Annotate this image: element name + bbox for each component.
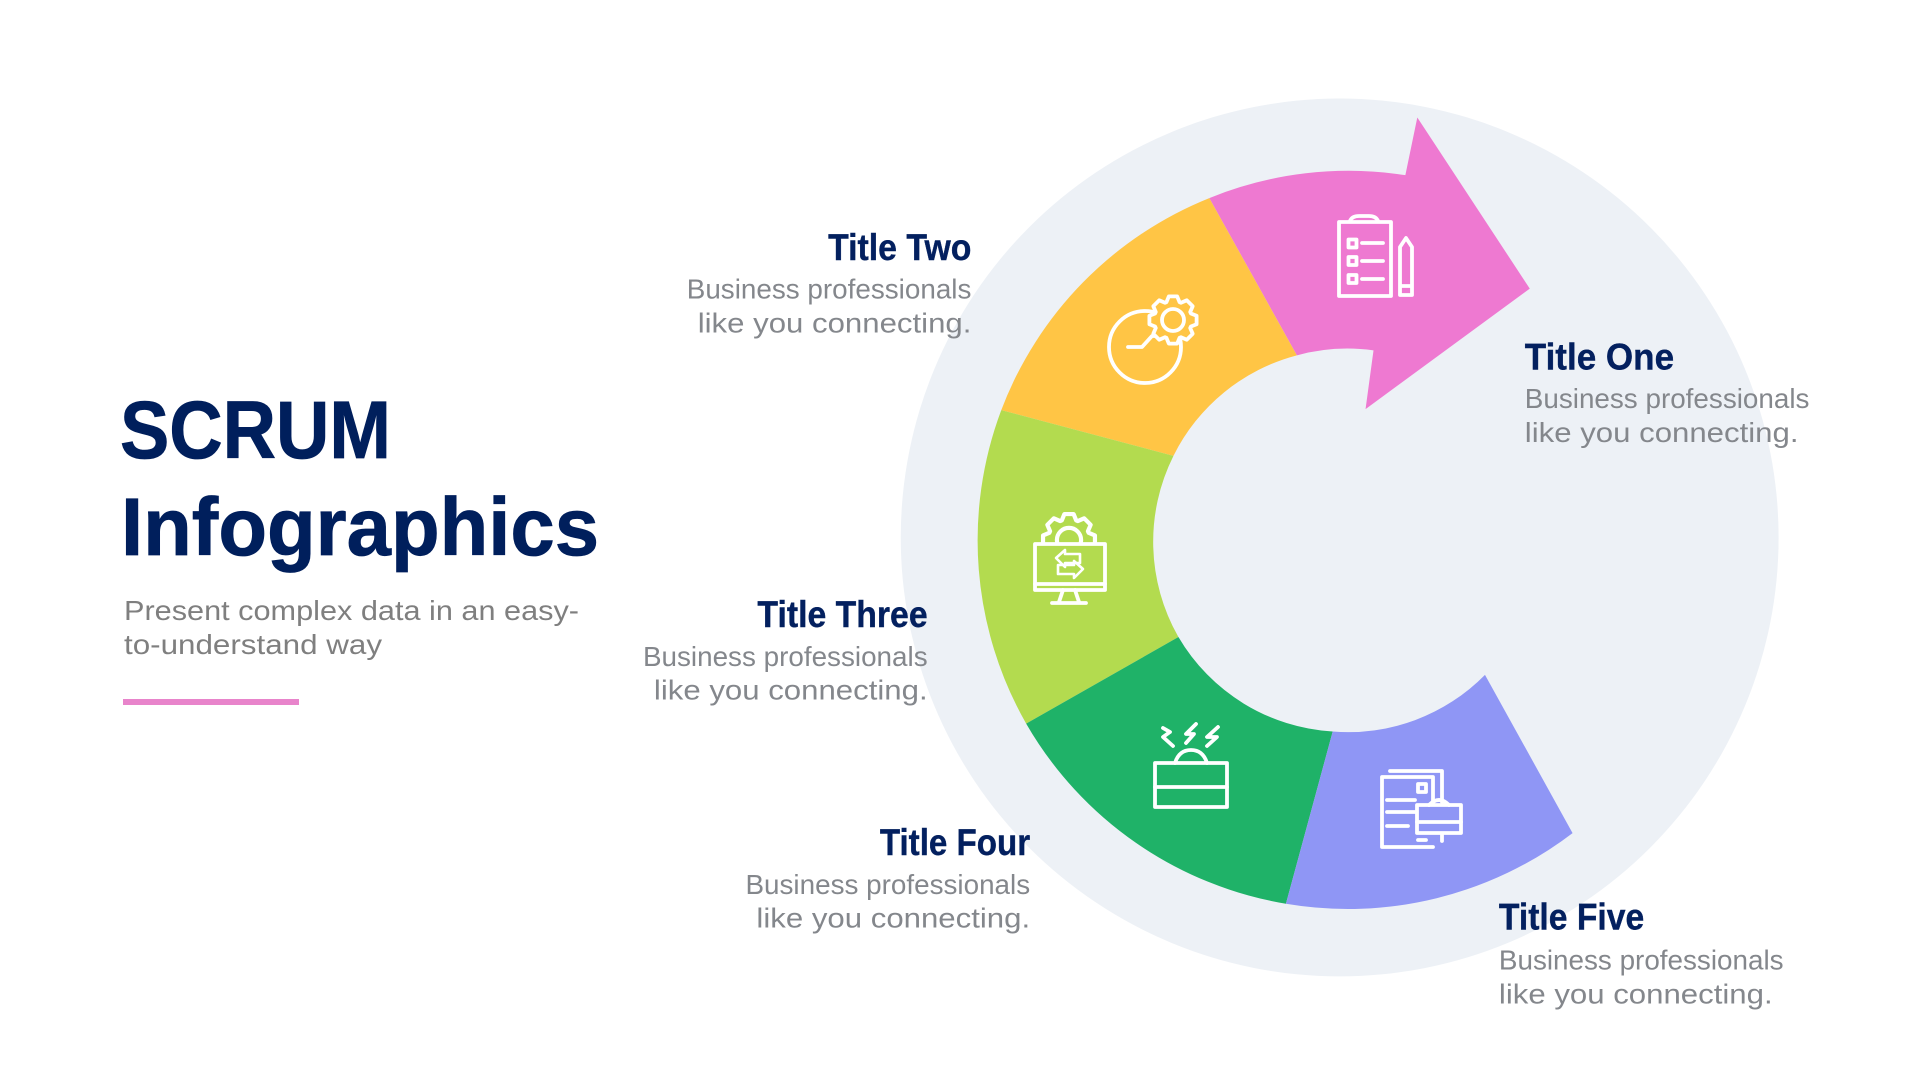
icon: monitor with gear [1035,514,1105,603]
segment one: pink arrow [1209,117,1530,409]
label: title five: like you connecting. [1499,978,1773,1009]
label: title two: Title Two [828,227,971,268]
label: title three [643,594,928,706]
label: title one: Title One [1525,336,1674,377]
background circle [901,99,1779,976]
subtitle: to-understand way [124,629,382,660]
label: title two: like you connecting. [698,307,971,338]
title: SCRUM [120,385,391,476]
label: title five: Business professionals [1499,944,1784,975]
title: Infographics [121,482,599,573]
subtitle: Present complex data in an easy- [124,595,579,626]
icon: briefcase with bolts [1155,724,1227,807]
label: title four: like you connecting. [756,903,1030,934]
label: title four: Business professionals [745,869,1030,900]
label: title two: Business professionals [687,274,971,305]
panel: circular diagram [901,99,1779,976]
accent underline [123,699,299,705]
title [120,385,599,573]
label: title one: Business professionals [1525,383,1809,414]
icon: documents with briefcase [1382,771,1461,847]
segment three: lime [978,410,1178,724]
label: title five: Title Five [1499,897,1644,938]
label: title one [1525,336,1809,448]
label: title five [1499,897,1784,1009]
subtitle [124,595,579,660]
label: title three: like you connecting. [654,675,928,706]
label: title three: Business professionals [643,641,928,672]
icon: clipboard and pencil [1339,216,1412,296]
icon: gauge and gear [1109,296,1197,383]
panel: labels [643,227,1809,1009]
label: title two [687,227,971,338]
segment four: green [1026,637,1333,904]
segment five: periwinkle [1286,675,1573,909]
segment two: yellow [1001,198,1297,456]
label: title four: Title Four [880,822,1030,863]
label: title four [745,822,1030,934]
panel: left heading [120,385,599,705]
label: title one: like you connecting. [1525,417,1799,448]
label: title three: Title Three [757,594,928,635]
